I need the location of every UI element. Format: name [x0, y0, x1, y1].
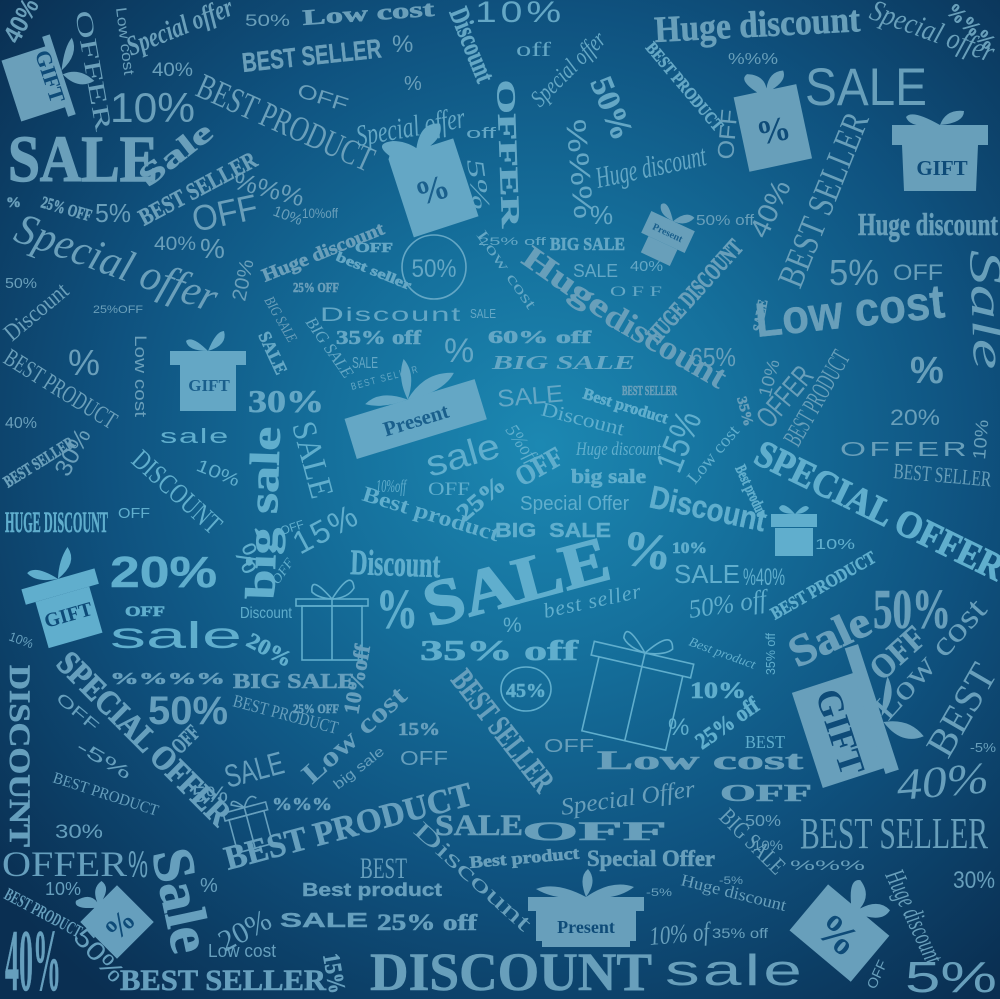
word collage: top right: Low cost [753, 275, 947, 348]
icon: gift box left middle: GIFT [42, 598, 96, 633]
word collage: bottom left: BIG SALE [233, 669, 355, 693]
word collage: bottom left: Low cost [296, 680, 414, 790]
word collage: centre: BIG SALE [495, 520, 611, 542]
icon: gift box top left [0, 26, 102, 131]
word collage: bottom left: SALE [220, 744, 288, 795]
word collage: top centre: BIG SALE [302, 313, 358, 382]
word collage: top left: 10% [271, 203, 305, 229]
word collage: bottom left: 50% [148, 689, 228, 733]
icon: gift box right: GIFT [916, 156, 968, 180]
word collage: top left: BEST PRODUCT [0, 344, 122, 435]
word collage: top centre: OFF [355, 241, 393, 256]
word collage: bottom left: DISCOUNT [3, 665, 36, 847]
word collage: bottom right: -5% [970, 740, 996, 755]
word collage: centre: OFF [118, 505, 150, 522]
word collage: bottom left: % [128, 844, 148, 886]
word collage: top centre: BIG SALE [550, 234, 625, 254]
word collage: centre: Discount [350, 542, 441, 585]
icon: present box bottom [528, 869, 644, 947]
word collage: bottom left: OFF [400, 748, 448, 770]
word collage: top centre: Discount [320, 305, 462, 326]
word collage: top right: BEST SELLER [770, 106, 878, 293]
word collage: top centre: 40% [630, 258, 663, 275]
word collage: bottom right: Discount [408, 817, 537, 937]
word collage: top left: SALE [8, 123, 158, 196]
word collage: top centre: 25% off [478, 236, 548, 248]
word collage: bottom right: OFF [544, 736, 594, 756]
word collage: bottom left: % [200, 875, 218, 897]
word collage: bottom left: SALE [280, 910, 368, 932]
word collage: bottom left: 30% [55, 822, 103, 843]
word collage: bottom right: Special Offer [587, 846, 715, 871]
word collage: centre: OFF [510, 441, 569, 493]
word collage: bottom left: Sale [139, 842, 225, 958]
word collage: bottom left: Best product [302, 880, 442, 900]
badge: 50 percent circle [402, 235, 466, 299]
word collage: top centre: SALE [254, 328, 292, 377]
word collage: centre: 5%off [501, 421, 544, 469]
word collage: bottom left: 15% [398, 719, 440, 739]
word collage: top left: BIG SALE [261, 294, 299, 345]
word collage: top left: %%% [230, 167, 307, 212]
word collage: bottom left: 5% [192, 782, 228, 807]
word collage: centre: OFF [125, 604, 165, 620]
word collage: top left: OFF [294, 80, 351, 117]
badge: 45 percent ellipse [501, 667, 551, 711]
word collage: bottom left: OFF [166, 720, 205, 759]
word collage: top left: OFFER [69, 9, 116, 133]
word collage: centre: Best product [687, 634, 758, 672]
word collage: top right: SALE [805, 58, 927, 117]
word collage: bottom right: 10% of [648, 917, 713, 951]
badge: 50 percent circle: 50% [412, 255, 456, 283]
word collage: top right: HUGE DISCOUNT [642, 235, 748, 349]
word collage: top centre: Special offer [353, 101, 468, 153]
word collage: centre: % [503, 614, 522, 637]
word collage: centre: 10% [690, 678, 746, 703]
word collage: bottom right: 30% [953, 867, 995, 894]
word collage: top left: 5% [95, 198, 131, 228]
word collage: bottom left: BEST SELLER [120, 964, 326, 997]
word collage: top left: Huge discount [259, 218, 388, 287]
word collage: centre: 20% [243, 627, 297, 672]
word collage: centre: 35% off [763, 633, 778, 675]
word collage: top left: BEST SELLER [135, 147, 262, 231]
icon: large gift box lower right [784, 634, 931, 794]
word collage: centre: % [376, 579, 418, 641]
icon: small gift next to discount [771, 505, 817, 556]
word collage: bottom left: 50% [68, 922, 131, 988]
word collage: centre: 10% [194, 455, 243, 491]
word collage: bottom left: 25% off [377, 910, 477, 935]
word collage: centre: SALE [284, 417, 340, 502]
word collage: top left: 40% [5, 415, 37, 432]
word collage: top left: 10% [110, 84, 195, 131]
word collage: top left: 20% [228, 257, 259, 303]
word collage: top right: OFFER [840, 439, 970, 461]
word collage: top centre: best seller [334, 250, 413, 294]
word collage: top left: % [6, 195, 21, 211]
icon: gift box percent bottom left: % [98, 903, 142, 947]
word collage: top centre: Special offer [526, 26, 612, 112]
word collage: bottom right: -5% [646, 887, 672, 899]
word collage: centre: %40% [743, 564, 785, 591]
word collage: top centre: Discount [443, 3, 501, 87]
word collage: centre [5, 386, 1000, 754]
word collage: bottom right: 50% [745, 813, 781, 830]
word collage: top right: discount [598, 297, 734, 397]
word collage: bottom right: OFF [863, 957, 890, 991]
word collage: top right: 5% [829, 252, 879, 293]
word collage: bottom right: OFF [863, 619, 933, 688]
word collage: bottom right: sale [665, 946, 805, 995]
word collage: top right: 65% [690, 342, 736, 372]
word collage: bottom left: BEST SELLER [444, 662, 562, 799]
icon: gift box right [892, 111, 988, 191]
icon: gift box percent bottom left [68, 873, 154, 959]
icon: gift box left: GIFT [188, 376, 230, 395]
word collage: bottom right: Sale [781, 597, 878, 677]
word collage: top right: BEST SELLER [622, 384, 678, 399]
word collage: top left: 25%OFF [93, 304, 143, 316]
word collage: centre: OFF [268, 554, 297, 587]
word collage: top right: %%% [728, 51, 778, 68]
word collage: top centre: Huge discount [592, 139, 709, 195]
word collage: top left: 40% [154, 234, 196, 255]
word collage: bottom left: BEST PRODUCT [51, 770, 161, 820]
word collage: bottom right: Low cost [597, 746, 804, 775]
word collage: centre: Discount [539, 399, 627, 441]
word collage: top left: Low cost [112, 6, 137, 77]
word collage: bottom left: BEST PRODUCT [231, 691, 340, 738]
word collage: centre: HUGE DISCOUNT [5, 506, 108, 539]
word collage: top left: Sale [132, 115, 219, 194]
word collage: top centre: BIG SALE [490, 352, 635, 374]
word collage: centre: SALE [415, 523, 617, 641]
word collage: bottom right: Low cost [866, 591, 995, 727]
word collage: bottom left: 10%off [338, 642, 375, 716]
word collage: bottom right: %%% [790, 857, 865, 873]
word collage: centre: 20% [110, 548, 217, 597]
badge: 45 percent ellipse: 45% [506, 680, 546, 702]
word collage: centre: big sale [571, 466, 646, 488]
word collage: top left: Discount [0, 278, 74, 347]
word collage: centre: Special Offer [520, 493, 629, 515]
word collage: centre: Best product [360, 481, 503, 547]
icon: present box centre: Present [380, 399, 452, 441]
word collage: centre: 10% [672, 540, 707, 557]
word collage: centre: big sale [238, 426, 290, 600]
word collage: top right [516, 0, 1000, 492]
word collage: bottom right [370, 579, 1000, 999]
word collage: top left: 50% [245, 11, 290, 30]
word collage: top left: 30% [49, 424, 97, 481]
word collage: bottom right: BIG SALE [714, 804, 790, 880]
word collage: top left: 25% OFF [39, 193, 94, 225]
word collage: bottom right: Best product [469, 843, 580, 872]
word collage: top centre: % [444, 332, 474, 370]
word collage: centre: 25% [452, 471, 511, 527]
word collage: top centre: %%% [560, 118, 600, 220]
word collage: top left: % [68, 342, 100, 383]
icon: large gift box lower right: GIFT [808, 684, 873, 780]
word collage: centre: SALE [674, 559, 740, 589]
word collage: centre: 10%off [376, 476, 408, 496]
word collage: centre: best seller [541, 579, 644, 623]
word collage: top right: OFFER [750, 360, 820, 434]
icon: gift box percent top right: % [753, 110, 794, 153]
word collage: top left: BEST SELLER [0, 433, 78, 491]
word collage: bottom left: BEST PRODUCT [220, 776, 477, 878]
word collage: top left: BEST SELLER [240, 33, 383, 78]
word collage: bottom right: OFF [720, 781, 812, 807]
word collage: bottom left: Low cost [208, 941, 276, 961]
word collage: top centre: SALE [352, 355, 378, 372]
word collage: centre: BEST PRODUCT [767, 547, 879, 623]
word collage: top right: OFF [893, 260, 943, 285]
word collage: top centre [170, 0, 728, 459]
word collage: top left: % [200, 233, 225, 264]
word collage: top right: 40% [743, 175, 797, 243]
word collage: top left: 10%off [302, 205, 338, 221]
icon: gift box with percent [380, 119, 479, 238]
icon: present gift small: Present [651, 222, 685, 245]
word collage: bottom left: BEST PRODUCT [1, 884, 86, 941]
word collage: bottom right: 35% off [712, 925, 768, 941]
icon: small outline gift [221, 793, 276, 854]
word collage: top left: % [404, 73, 422, 95]
icon: present box centre [333, 341, 487, 459]
word collage: bottom left: 10% [45, 879, 81, 899]
word collage: top centre: OFFER [491, 79, 525, 228]
word collage: centre: OFF [428, 479, 470, 500]
word collage: centre: Low cost [683, 421, 743, 488]
word collage: top centre: % [590, 200, 613, 230]
word collage: top centre: 30% [248, 383, 324, 419]
word collage: centre: 50% off [687, 584, 772, 624]
icon: present gift small [634, 199, 700, 269]
word collage: top right: 35% [733, 395, 755, 428]
word collage: top centre: SALE [496, 380, 564, 413]
word collage: bottom left: OFF [52, 690, 102, 735]
icon: gift box percent bottom right [790, 866, 905, 982]
word collage: top left: Low cost [131, 335, 150, 417]
word collage: top left: Special offer [9, 203, 225, 322]
word collage: bottom right: OFF [522, 817, 667, 846]
icon: gift box with percent: % [410, 168, 454, 214]
word collage: top centre: 60% off [488, 327, 593, 347]
word collage: top right: 10% [969, 419, 992, 460]
word collage: top centre: 35% off [336, 327, 421, 349]
word collage: bottom left: 25% OFF [293, 701, 339, 716]
word collage: top centre: BEST SELLER [350, 364, 420, 393]
word collage: top centre: off [466, 125, 498, 142]
word collage: bottom left: SPECIAL OFFER [49, 644, 238, 834]
word collage: centre: 35% off [420, 636, 579, 667]
word collage: bottom right: SALE [435, 809, 523, 842]
word collage: bottom left: 20% [213, 903, 277, 958]
word collage: centre: BEST [745, 732, 785, 752]
word collage: centre: 15% [648, 405, 711, 478]
icon: gift box left [170, 331, 246, 411]
word collage: top right: 50% off [696, 212, 755, 229]
word collage: top centre: SALE [573, 261, 618, 281]
word collage: top left: % [392, 31, 413, 58]
icon: present box bottom: Present [557, 917, 615, 937]
word collage: top centre: BEST PRODUCT [642, 38, 728, 135]
word collage: top right: 20% [890, 405, 940, 430]
word collage: top right: OFF [712, 108, 742, 160]
word collage: centre: 15% [286, 497, 365, 561]
word collage: centre: Discount [647, 479, 770, 538]
word collage: top right: BEST PRODUCT [777, 345, 856, 451]
word collage: top right: 10% [755, 357, 784, 399]
word collage: top left: Low cost [302, 0, 436, 30]
word collage: centre: % [618, 519, 676, 581]
word collage: bottom left: big sale [330, 743, 387, 792]
word collage: top centre: 5% [461, 157, 494, 212]
word collage: centre: sale [160, 426, 230, 448]
word collage: centre: Discount [240, 605, 292, 622]
word collage: top centre: O F F [610, 284, 662, 300]
word collage: bottom right: 50% [873, 579, 951, 641]
word collage: top left: 40% [152, 60, 193, 81]
word collage: bottom left: OFFER [2, 844, 127, 884]
word collage: top left: BEST PRODUCT [191, 66, 381, 180]
word collage: top centre: off [516, 39, 552, 61]
word collage: centre: OFF [279, 517, 306, 538]
word collage: bottom left [1, 629, 562, 999]
word collage: centre: sale [421, 425, 504, 485]
word collage: bottom right: Huge discount [679, 870, 789, 915]
word collage: bottom right: Special Offer [559, 776, 697, 821]
word collage: bottom left: -5% [73, 736, 135, 783]
word collage: centre: Best product [581, 386, 671, 428]
word collage: top right: Huge [516, 238, 619, 325]
word collage: top centre: Low cost [473, 228, 540, 313]
word collage: bottom left: %%%% [110, 669, 225, 688]
word collage: centre: Best product [731, 463, 771, 523]
icon: gift box percent top right [729, 65, 812, 172]
word collage: top centre: 50% [584, 71, 641, 145]
word collage: centre: Huge discount [575, 439, 662, 460]
word collage: top left [0, 0, 436, 491]
word collage: top right: SALE [751, 299, 771, 333]
icon: outline gift [296, 580, 368, 660]
word collage: centre: sale [110, 615, 242, 656]
word collage: top left: OFF [188, 186, 261, 240]
word collage: bottom right: 40% [895, 753, 991, 810]
icon: gift box percent bottom right: % [807, 904, 868, 966]
icon: gift box left middle [14, 541, 112, 651]
word collage: bottom left: 10% [7, 629, 36, 652]
icon: outline gift centre [574, 624, 698, 752]
word collage: top left: 50% [5, 275, 37, 292]
word collage: top centre: SALE [470, 306, 496, 321]
word collage: bottom right: 10% [753, 837, 783, 853]
word collage: top left: 25% OFF [293, 281, 339, 296]
word collage: centre: % [227, 538, 271, 579]
word collage: bottom left: %%% [272, 794, 332, 814]
word collage: centre: DISCOUNT [125, 444, 228, 541]
word collage: bottom left: BEST [360, 852, 407, 885]
word collage: centre: 10% [815, 536, 855, 553]
word collage: centre: 25% off [691, 692, 764, 754]
icon: gift box top left: GIFT [30, 47, 71, 106]
word collage: centre: % [668, 714, 689, 741]
word collage: top right: % [910, 350, 944, 392]
word collage: bottom right: -5% [719, 875, 743, 887]
